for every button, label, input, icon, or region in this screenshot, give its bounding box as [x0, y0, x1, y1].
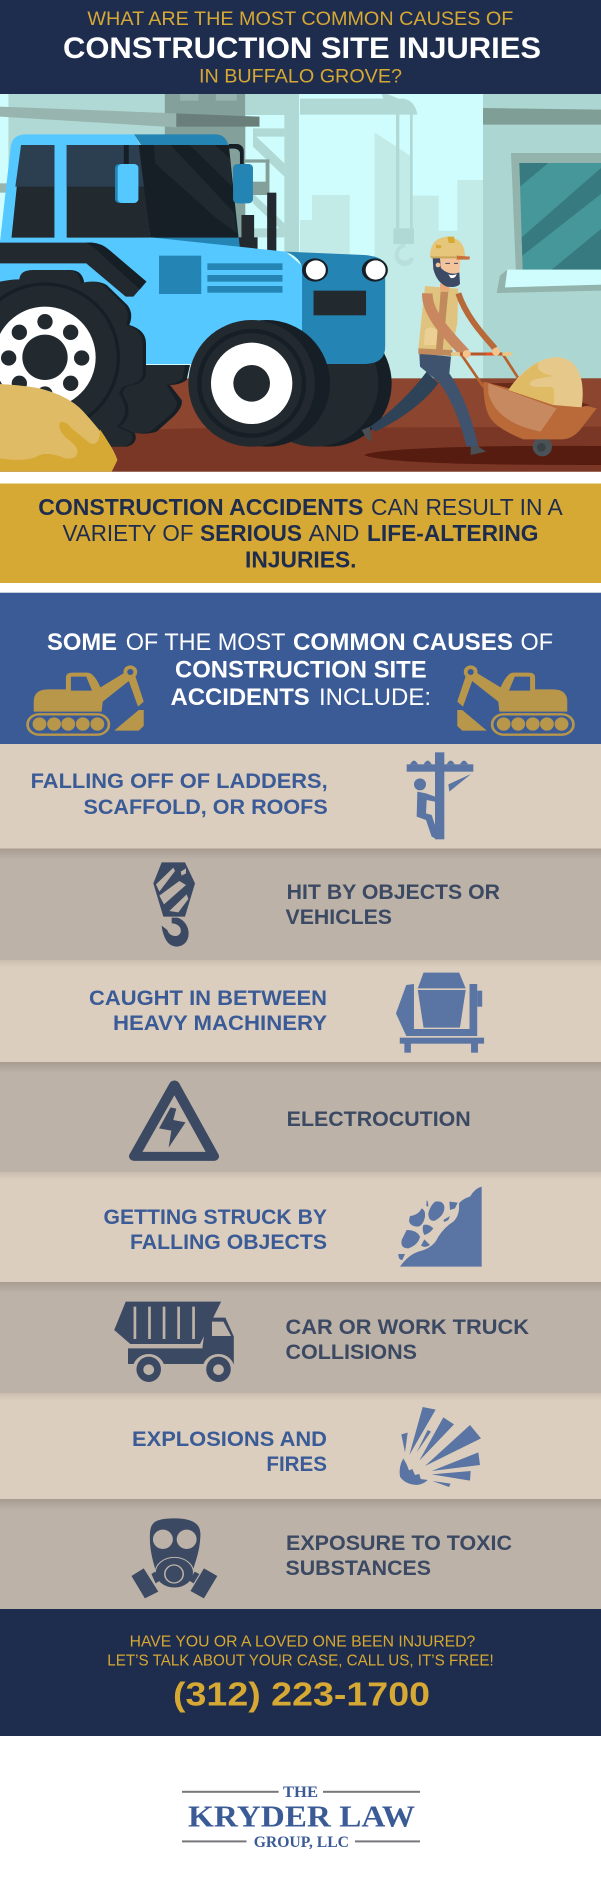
panel: call to action [0, 1609, 601, 1736]
intro text [47, 629, 553, 711]
icon: rockslide [398, 1187, 482, 1267]
row 5 text [104, 1206, 327, 1254]
call to action text: LET’S TALK ABOUT YOUR CASE, CALL US, IT’S FREE! [107, 1653, 494, 1670]
row 6: truck collisions [0, 1282, 601, 1393]
row 2: hit by objects [0, 848, 601, 960]
icon: worker climbing utility pole [407, 752, 473, 839]
illustration: tractor and worker on a construction site [0, 94, 601, 472]
tractor rear wheel [0, 270, 190, 457]
icon: excavator left [28, 665, 144, 735]
row 1 text [31, 770, 328, 819]
heading line 3: IN BUFFALO GROVE? [199, 66, 402, 88]
statement text: INJURIES. [245, 547, 356, 573]
statement text: LIFE-ALTERING [367, 520, 538, 546]
row 5 text: FALLING OBJECTS [130, 1231, 327, 1254]
call to action text: HAVE YOU OR A LOVED ONE BEEN INJURED? [130, 1634, 475, 1651]
row 8 text [286, 1532, 512, 1580]
tractor rear structures [229, 144, 276, 253]
heading line 1: WHAT ARE THE MOST COMMON CAUSES OF [87, 8, 513, 30]
icon: cement mixer [396, 973, 484, 1053]
row 8: toxic substances [0, 1499, 601, 1609]
intro text: CONSTRUCTION SITE [175, 657, 427, 684]
row 7 text: EXPLOSIONS AND [132, 1428, 327, 1451]
row 8 text: SUBSTANCES [286, 1557, 431, 1580]
intro text: ACCIDENTS [170, 684, 310, 711]
icon: explosion [400, 1407, 481, 1487]
call to action text [107, 1634, 494, 1670]
worker with wheelbarrow [362, 237, 597, 456]
row 3: caught in machinery [0, 960, 601, 1062]
logo: The Kryder Law Group: THE [283, 1784, 318, 1801]
tractor cab [0, 134, 253, 248]
phone number: (312) 223-1700 [173, 1676, 430, 1713]
row 3 text: HEAVY MACHINERY [113, 1012, 327, 1035]
logo: The Kryder Law Group [182, 1784, 420, 1851]
icon: crane hook [153, 862, 195, 947]
tractor front wheel [188, 320, 330, 447]
wheelbarrow [462, 355, 597, 456]
row 4 text: ELECTROCUTION [287, 1108, 471, 1131]
row 6 text: COLLISIONS [286, 1341, 417, 1364]
sand pile [0, 384, 117, 472]
tractor hood and body [0, 238, 388, 364]
icon: dump truck [114, 1302, 235, 1385]
row 1: falling [0, 744, 601, 848]
row 7: explosions [0, 1393, 601, 1499]
illustration background [0, 94, 601, 472]
row 3 text: CAUGHT IN BETWEEN [89, 987, 327, 1010]
tractor [0, 134, 392, 472]
panel: gold statement band [0, 484, 601, 583]
row 2 text: HIT BY OBJECTS OR [287, 881, 500, 904]
row 8 text: EXPOSURE TO TOXIC [286, 1532, 512, 1555]
intro text: SOME [47, 629, 117, 656]
intro text: INCLUDE: [319, 684, 431, 711]
panel: blue intro band [0, 593, 601, 744]
row 2 text [286, 881, 500, 929]
row 6 text [286, 1316, 529, 1364]
logo: The Kryder Law Group: KRYDER LAW [188, 1799, 415, 1834]
statement text [38, 494, 563, 573]
row 7 text [132, 1428, 327, 1476]
row 6 text: CAR OR WORK TRUCK [286, 1316, 529, 1339]
statement text: AND [308, 520, 360, 546]
panel: header [0, 0, 601, 94]
row 4: electrocution [0, 1062, 601, 1172]
icon: gas mask [131, 1518, 217, 1598]
statement text: SERIOUS [200, 520, 302, 546]
worker body [362, 283, 511, 455]
row 1 text: FALLING OFF OF LADDERS, [31, 770, 328, 793]
row 5: falling objects [0, 1172, 601, 1282]
statement text: CAN RESULT IN A [371, 494, 563, 520]
row 3 text [89, 987, 327, 1035]
statement text: CONSTRUCTION ACCIDENTS [38, 494, 363, 520]
intro text: OF THE MOST [126, 629, 286, 656]
icon: high voltage warning triangle [134, 1085, 214, 1156]
tractor back wheel [290, 353, 392, 447]
heading line 2: CONSTRUCTION SITE INJURIES [63, 32, 541, 65]
intro text: COMMON CAUSES [293, 629, 513, 656]
row 1 text: SCAFFOLD, OR ROOFS [84, 796, 328, 819]
icon: excavator right [457, 665, 573, 735]
logo: The Kryder Law Group: GROUP, LLC [254, 1834, 349, 1851]
intro text: OF [520, 629, 553, 656]
row 5 text: GETTING STRUCK BY [104, 1206, 327, 1229]
worker head and hard hat [430, 237, 470, 287]
row 7 text: FIRES [266, 1453, 327, 1476]
row 2 text: VEHICLES [286, 906, 392, 929]
statement text: VARIETY OF [62, 520, 194, 546]
